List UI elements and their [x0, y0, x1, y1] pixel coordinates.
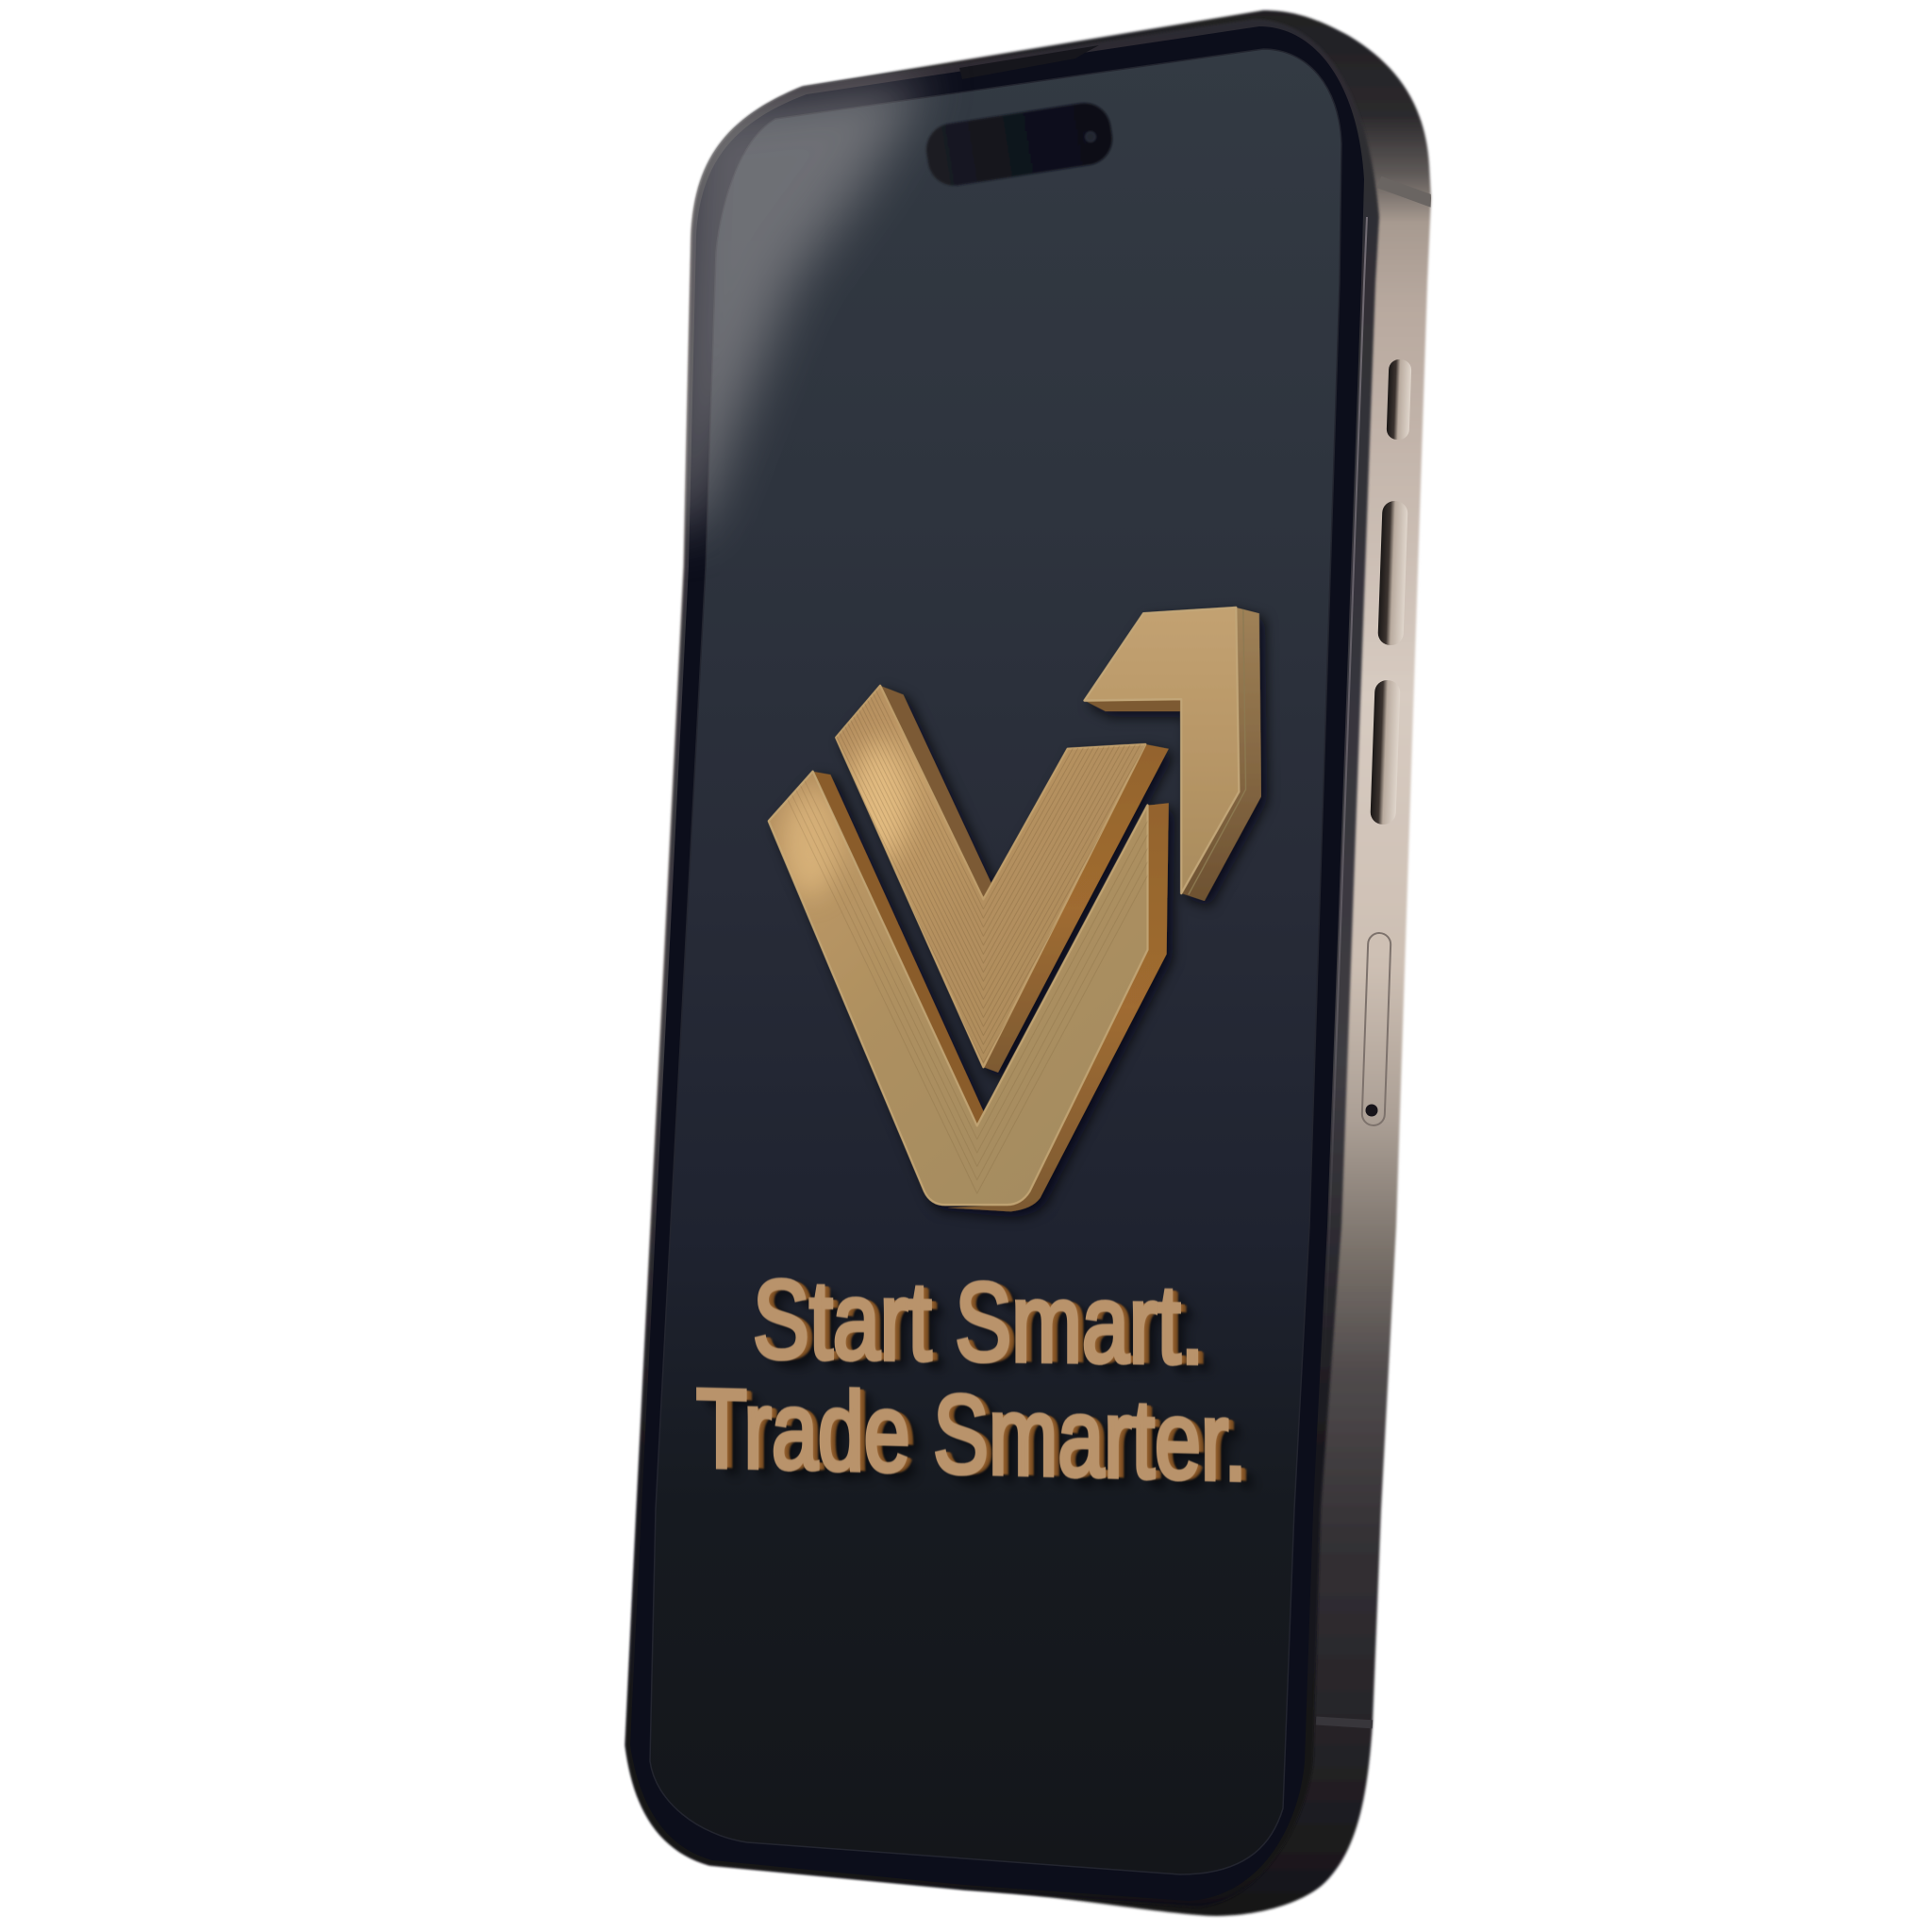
dynamic island: [923, 99, 1116, 190]
logo upper chevron: [834, 685, 1175, 1080]
antenna bands: [1316, 182, 1434, 1724]
screen glare: [660, 75, 929, 528]
screen: [650, 49, 1341, 1874]
logo: gold V with arrow: [766, 566, 1261, 1211]
phone front edge: [625, 19, 1379, 1907]
phone: [625, 10, 1434, 1916]
slogan line 1: Start Smart.: [753, 1257, 1204, 1388]
black bezel: [630, 26, 1364, 1901]
logo arrow: [1085, 608, 1261, 901]
slogan line 2: Trade Smarter.: [696, 1366, 1247, 1505]
volume down button: [1370, 680, 1401, 824]
speaker slot: [959, 45, 1099, 79]
volume up button: [1377, 501, 1408, 645]
edge highlight: [1324, 217, 1367, 1368]
slogan text: [696, 1257, 1251, 1505]
SIM tray: [1361, 933, 1391, 1125]
silent switch: [1387, 359, 1411, 440]
logo outer chevron: [768, 770, 1179, 1221]
phone metal side frame: [625, 10, 1431, 1916]
